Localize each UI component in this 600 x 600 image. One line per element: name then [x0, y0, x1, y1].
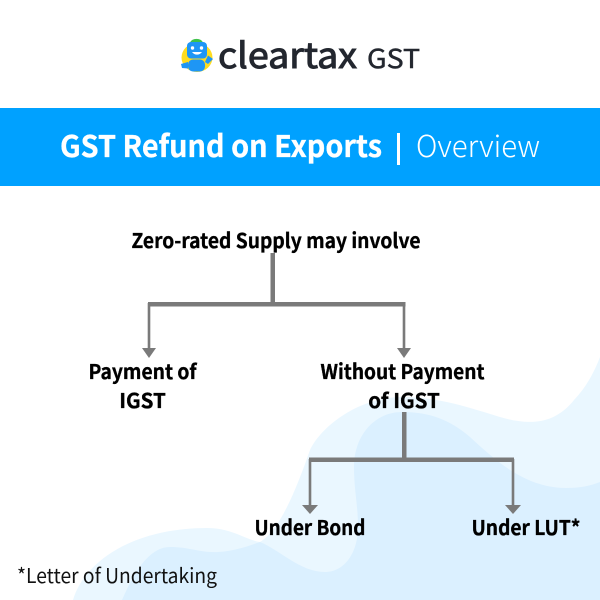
label: payment of IGST [88, 355, 198, 414]
banner separator [397, 133, 400, 165]
label: payment of IGST: Payment of [88, 355, 198, 385]
label: payment of IGST: IGST [119, 384, 166, 414]
banner title: GST Refund on Exports [60, 122, 382, 166]
label: under bond: Under Bond [254, 511, 366, 541]
logo wordmark: cleartax [218, 28, 357, 79]
label: without payment of IGST [320, 355, 485, 414]
background wave: lighter layer [73, 357, 600, 600]
banner subtitle: Overview [416, 122, 540, 166]
background wave: darker layer [122, 412, 600, 600]
logo [181, 28, 420, 79]
label: under LUT: Under LUT* [472, 511, 580, 541]
logo GST label: GST [367, 39, 420, 76]
heading: zero-rated supply: Zero-rated Supply may involve [132, 224, 421, 254]
footnote: *Letter of Undertaking [17, 559, 217, 589]
label: without payment of IGST: of IGST [368, 384, 440, 414]
connector: top tree [142, 253, 411, 358]
icon: robot mascot [181, 39, 213, 72]
connector: lower tree [302, 412, 521, 514]
header banner [0, 108, 600, 186]
label: without payment of IGST: Without Payment [320, 355, 485, 385]
